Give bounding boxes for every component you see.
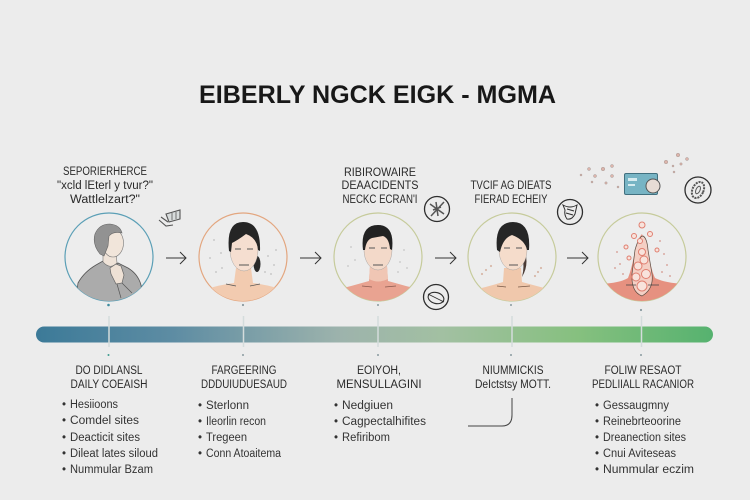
column 2: text block: DDDUIUDUESAUD xyxy=(201,379,287,391)
column 5: text block: Gessaugmny xyxy=(603,400,669,412)
timeline markers xyxy=(107,304,642,356)
illustration: woman with ponytail xyxy=(468,213,556,305)
heading: stage 4 xyxy=(470,180,552,206)
column 3: text block: MENSULLAGINI xyxy=(336,379,422,391)
scattered particles xyxy=(580,153,688,188)
column 2: text block: FARGEERING xyxy=(212,365,277,377)
illustration: skin cross-section with inflamed follicle xyxy=(598,213,686,305)
icon: treatment card xyxy=(624,174,660,194)
column 5: text block xyxy=(592,365,694,476)
column 5: text block: PEDLIIALL RACANIOR xyxy=(592,379,694,391)
illustration: face with red neck xyxy=(334,213,422,305)
column 1: text block: Deacticit sites xyxy=(70,432,140,444)
column 2: text block: • xyxy=(198,416,202,428)
column 5: text block: • xyxy=(595,400,599,412)
column 3: text block: EOIYOH, xyxy=(357,365,401,377)
heading: stage 1 xyxy=(57,166,153,206)
icon: microbe xyxy=(685,177,711,203)
arrow 4 xyxy=(567,252,588,264)
column 5: text block: • xyxy=(595,432,599,444)
column 5: text block: Cnui Aviteseas xyxy=(603,448,676,460)
illustration: woman with scalp and facial speckles xyxy=(199,213,287,305)
column 5: text block: • xyxy=(595,416,599,428)
column 1: text block: Dileat lates siloud xyxy=(70,448,158,460)
column 4: text block xyxy=(475,365,551,391)
heading: stage 4: TVCIF AG DIEATS xyxy=(470,180,552,192)
column 1: text block xyxy=(62,365,158,476)
column 3: text block: Nedgiuen xyxy=(342,400,393,412)
heading: stage 3: NECKC ECRAN'I xyxy=(342,194,418,206)
column 2: text block: • xyxy=(198,432,202,444)
column 5: text block: Dreanection sites xyxy=(603,432,686,444)
column 1: text block: • xyxy=(62,464,66,476)
heading: stage 1: SEPORIERHERCE xyxy=(63,166,147,178)
column 5: text block: FOLIW RESAOT xyxy=(604,365,682,377)
heading: stage 1: "xcld lEterl y tvur?" xyxy=(57,180,153,192)
illustration: elderly person touching neck xyxy=(65,213,153,305)
column 2: text block xyxy=(198,365,287,460)
column 1: text block: • xyxy=(62,399,66,411)
column 5: text block: Reinebrteoorine xyxy=(603,416,681,428)
column 2: text block: • xyxy=(198,448,202,460)
column 1: text block: Hesiioons xyxy=(70,399,118,411)
arrow 3 xyxy=(435,252,456,264)
column 1: text block: Comdel sites xyxy=(70,415,139,427)
title: EIBERLY NGCK EIGK - MGMA xyxy=(199,81,556,109)
column 2: text block: Ileorlin recon xyxy=(206,416,266,428)
column 3: text block xyxy=(334,365,426,444)
column 5: text block: Nummular eczim xyxy=(603,464,694,476)
column 3: text block: Cagpectalhifites xyxy=(342,416,426,428)
column 2: text block: Tregeen xyxy=(206,432,247,444)
arrow 1 xyxy=(166,252,186,264)
column 5: text block: • xyxy=(595,448,599,460)
column 4: text block: NIUMMICKIS xyxy=(482,365,544,377)
column 1: text block: • xyxy=(62,448,66,460)
timeline bar xyxy=(36,326,713,342)
icon: animal face xyxy=(558,200,582,224)
icon: leaf xyxy=(424,284,448,310)
column 2: text block: Conn Atoaitema xyxy=(206,448,282,460)
heading: stage 3: DEAACIDENTS xyxy=(342,180,419,192)
column 3: text block: Refiribom xyxy=(342,432,390,444)
column 2: text block: Sterlonn xyxy=(206,400,249,412)
arrow 2 xyxy=(300,252,321,264)
column 4: text block: DeIctstsy MOTT. xyxy=(475,379,551,391)
icon: insect xyxy=(424,196,450,222)
column 2: text block: • xyxy=(198,400,202,412)
heading: stage 3: RIBIROWAIRE xyxy=(344,167,416,179)
heading: stage 3 xyxy=(342,167,419,206)
column 1: text block: DAILY COEAISH xyxy=(70,379,148,391)
heading: stage 4: FIERAD ECHEIY xyxy=(474,194,548,206)
column 3: text block: • xyxy=(334,432,338,444)
column 1: text block: DO DIDLANSL xyxy=(76,365,143,377)
column 3: text block: • xyxy=(334,416,338,428)
heading: stage 1: Wattlelzart?" xyxy=(70,194,140,206)
column 1: text block: • xyxy=(62,432,66,444)
column 3: text block: • xyxy=(334,400,338,412)
column 1: text block: • xyxy=(62,415,66,427)
bracket connector xyxy=(468,398,512,426)
column 1: text block: Nummular Bzam xyxy=(70,464,153,476)
column 5: text block: • xyxy=(595,464,599,476)
icon: cash in hand xyxy=(159,210,180,226)
